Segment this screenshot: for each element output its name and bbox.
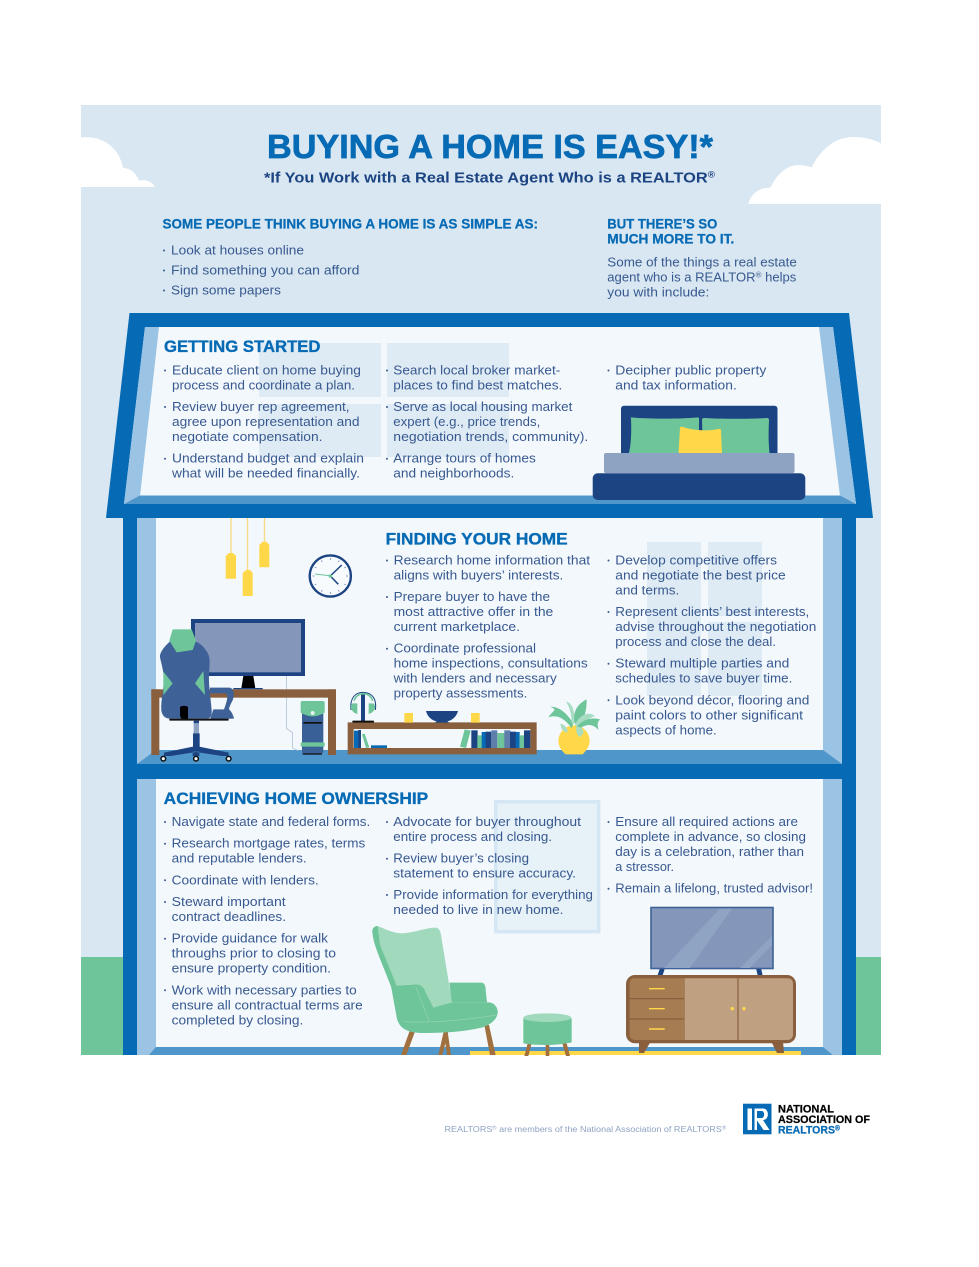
footer disclaimer: ® (722, 1124, 726, 1132)
illustration: armchair and ottoman (372, 926, 572, 1056)
section: achieving home ownership: and reputable lenders. (172, 851, 307, 866)
section: getting started: agree upon representation and (172, 414, 360, 429)
section: getting started: Review buyer rep agreement, (172, 399, 350, 414)
section: achieving home ownership: completed by closing. (172, 1012, 303, 1027)
section: achieving home ownership: Provide guidance for walk (172, 931, 328, 946)
attic floor (124, 496, 856, 504)
illustration: media console (626, 975, 796, 1053)
intro: more to it: agent who is a REALTOR (607, 270, 757, 285)
section: finding your home: aligns with buyers’ interests. (394, 567, 563, 582)
intro heading right (607, 217, 734, 246)
section: finding your home: home inspections, consultations (394, 656, 588, 671)
section: achieving home ownership (164, 789, 813, 1027)
logo wordmark: ASSOCIATION OF (778, 1114, 870, 1126)
headphones (351, 692, 376, 723)
footer disclaimer: ® (492, 1124, 497, 1132)
section: achieving home ownership: Work with necessary parties to (172, 982, 357, 997)
intro: some people think (162, 217, 538, 297)
section: achieving home ownership: Research mortgage rates, terms (172, 836, 366, 851)
section: finding your home: Represent clients’ best interests, (615, 604, 809, 619)
section: achieving home ownership: entire process and closing. (393, 829, 552, 844)
section: achieving home ownership: Review buyer’s closing (393, 851, 529, 866)
intro: more to it (607, 217, 797, 300)
grass (81, 957, 881, 1055)
section: getting started: Understand budget and explain (172, 451, 364, 466)
cable (286, 676, 298, 751)
illustration: desk with computer and chair (151, 619, 336, 761)
section: achieving home ownership: ensure all contractual terms are (172, 997, 363, 1012)
section: finding your home: Steward multiple parties and (615, 656, 789, 671)
intro: some people think: Find something you can afford (171, 262, 360, 277)
section: achieving home ownership: Provide information for everything (393, 887, 593, 902)
section: finding your home: current marketplace. (394, 619, 520, 634)
heading: GETTING STARTED (164, 337, 320, 356)
section: achieving home ownership: complete in advance, so closing (615, 829, 806, 844)
armchair (372, 926, 498, 1033)
attic left wall (124, 327, 159, 504)
section: getting started: Educate client on home buying (172, 362, 361, 378)
subtitle: ® (708, 170, 715, 180)
section: getting started: process and coordinate a plan. (172, 378, 355, 392)
section: finding your home: with lenders and necessary (393, 671, 557, 686)
gaming chair (160, 629, 234, 761)
section: getting started: expert (e.g., price trends, (393, 414, 540, 429)
section: getting started: Arrange tours of homes (393, 451, 536, 466)
intro heading right: MUCH MORE TO IT. (607, 231, 734, 246)
illustration: potted plant (548, 699, 600, 754)
ottoman (523, 1013, 572, 1045)
section: achieving home ownership: statement to ensure accuracy. (393, 866, 576, 881)
section: getting started: negotiate compensation. (172, 429, 322, 444)
illustration: rug (470, 1051, 801, 1055)
subtitle: *If You Work with a Real Estate Agent Who is a REALTOR (264, 170, 670, 186)
section: finding your home: and negotiate the best price (615, 567, 786, 582)
section: finding your home: and terms. (615, 582, 679, 597)
section: finding your home: schedules to save buyer time. (615, 671, 792, 686)
section: achieving home ownership: contract deadlines. (172, 909, 286, 924)
shelf (348, 722, 537, 754)
logo wordmark: ® (835, 1124, 841, 1132)
roof (106, 313, 873, 518)
illustration: shelf with books and decor (348, 692, 537, 754)
section: achieving home ownership: day is a celebration, rather than (615, 844, 804, 859)
window: lower floor (496, 802, 599, 932)
section: achieving home ownership: Coordinate with lenders. (172, 872, 319, 887)
attic interior (124, 327, 856, 504)
section: getting started: and tax information. (615, 378, 737, 392)
section: finding your home: Research home information that (394, 552, 590, 567)
intro: some people think: Sign some papers (171, 282, 281, 297)
section: finding your home: most attractive offer in the (394, 604, 553, 619)
windows: attic (259, 343, 509, 457)
illustration: clock (310, 555, 351, 597)
section: achieving home ownership: Advocate for buyer throughout (393, 814, 581, 829)
sky background panel (81, 105, 881, 1055)
section: achieving home ownership: Ensure all required actions are (615, 814, 798, 829)
section: getting started: Decipher public property (615, 362, 767, 378)
section: getting started: negotiation trends, community). (393, 429, 588, 444)
books left (354, 730, 387, 748)
section: finding your home: aspects of home. (615, 722, 717, 737)
footer disclaimer: are members of the National Association of REALTORS (497, 1125, 722, 1134)
intro: more to it: Some of the things a real estate (607, 255, 797, 270)
illustration: bed (593, 406, 805, 500)
books right (460, 729, 530, 748)
section: finding your home (386, 529, 816, 737)
intro: more to it: ® (756, 271, 762, 280)
section: getting started: and neighborhoods. (393, 466, 514, 481)
section: finding your home: property assessments. (394, 686, 527, 701)
intro heading right: BUT THERE’S SO (607, 217, 717, 232)
section: getting started: places to find best matches. (393, 378, 562, 392)
logo mark (743, 1104, 772, 1134)
section: achieving home ownership: Remain a lifelong, trusted advisor! (615, 881, 813, 896)
attic right wall (819, 327, 856, 504)
section: finding your home: Coordinate professional (394, 641, 536, 656)
section: achieving home ownership: needed to live in new home. (393, 902, 564, 917)
section: getting started: Serve as local housing market (393, 399, 573, 414)
section: achieving home ownership: throughs prior to closing to (172, 946, 336, 961)
section: finding your home: advise throughout the negotiation (615, 619, 816, 634)
section: finding your home: Look beyond décor, flooring and (615, 692, 809, 707)
monitor (191, 619, 305, 689)
heading: FINDING YOUR HOME (386, 529, 568, 548)
section: achieving home ownership: Navigate state and federal forms. (172, 814, 370, 829)
bowl (426, 711, 458, 723)
section: finding your home: Prepare buyer to have the (394, 589, 550, 604)
logo wordmark (778, 1103, 870, 1136)
pc tower (301, 701, 325, 755)
logo wordmark: REALTORS (778, 1124, 838, 1136)
ottoman legs (524, 1043, 570, 1056)
illustration: television (651, 908, 773, 977)
left cloud (81, 137, 155, 187)
logo wordmark: NATIONAL (778, 1103, 834, 1115)
section: achieving home ownership: a stressor. (615, 859, 674, 874)
windows: middle floor (647, 542, 762, 696)
intro: more to it: helps (761, 270, 797, 285)
section: finding your home: Develop competitive offers (615, 552, 777, 567)
section: finding your home: process and close the deal. (615, 634, 776, 649)
intro heading left: SOME PEOPLE THINK BUYING A HOME IS AS SIMPLE AS: (162, 217, 538, 232)
section: achieving home ownership: Steward important (172, 894, 286, 909)
title: BUYING A HOME IS EASY!* (267, 129, 713, 166)
illustration: pendant lamps (226, 518, 269, 596)
house structure (106, 313, 873, 1059)
candles (404, 713, 480, 723)
right cloud (748, 137, 881, 204)
house walls (123, 518, 856, 1059)
intro: more to it: you with include: (607, 285, 709, 300)
section: finding your home: paint colors to other significant (615, 707, 803, 722)
section: getting started: Search local broker market- (393, 362, 560, 378)
footer disclaimer: REALTORS (444, 1125, 487, 1134)
desk (151, 689, 336, 755)
heading: ACHIEVING HOME OWNERSHIP (164, 789, 428, 808)
section: getting started (164, 337, 767, 481)
section: getting started: what will be needed financially. (171, 466, 360, 481)
intro: some people think: Look at houses online (171, 242, 304, 257)
section: achieving home ownership: ensure property condition. (172, 961, 331, 976)
chair legs (401, 1025, 496, 1055)
